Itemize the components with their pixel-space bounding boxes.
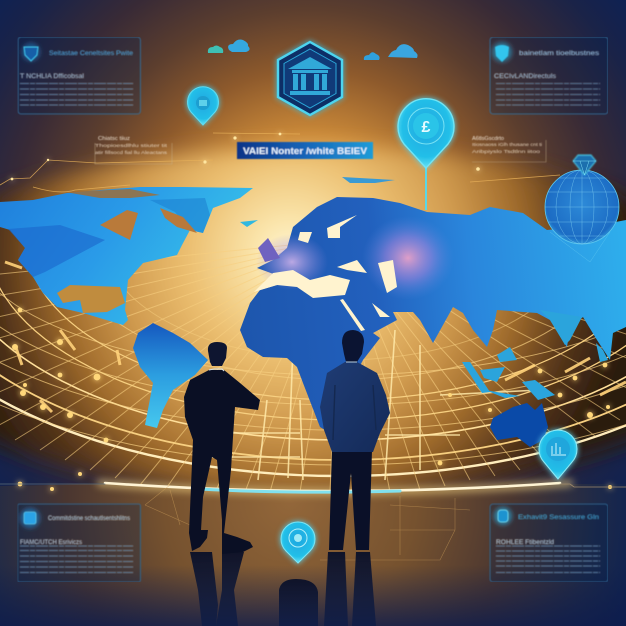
- node lights on upper lines: [11, 133, 480, 180]
- panel body lines: [20, 84, 133, 105]
- icon: small map pin: [188, 87, 218, 125]
- right man trousers: [329, 450, 372, 550]
- text block: right center callout: A6tlsGscdrto: [472, 136, 504, 142]
- seas cut-outs: [254, 215, 397, 331]
- panel subheading: T NCHLIA Dfficobsal: [20, 74, 84, 80]
- text block: left center callout: Thopioesdlhlu stiuter tit: [95, 143, 168, 149]
- hexagon bank badge: [278, 42, 342, 115]
- panel heading: Exhavit9 Sesassure Gln: [518, 514, 600, 521]
- pink glow over Central Asia: [362, 216, 454, 300]
- panel subheading: FIAMC/UTCH Esriviczs: [20, 540, 82, 546]
- icon: stacked badge: [20, 508, 40, 528]
- panel subheading: ROHLEE Ftibentzld: [496, 540, 554, 546]
- text block: left center callout: atir fillsocd fial llu Aleactans: [95, 150, 168, 156]
- left man legs and suit: [184, 370, 260, 554]
- continent: Southeast Asia islands: [462, 310, 608, 400]
- text block: left center callout: [95, 136, 172, 164]
- panel: bottom left info: [18, 504, 140, 582]
- continent: North America: [0, 187, 253, 325]
- right man arm seams: [333, 385, 376, 440]
- pastel glow over Europe: [256, 234, 328, 290]
- glowing nodes on the map: [12, 308, 612, 491]
- continent: Australia: [490, 403, 548, 447]
- right man head: [342, 330, 364, 362]
- panel: bottom right info: [490, 504, 608, 582]
- clouds left: [208, 40, 250, 53]
- text block: right center callout: [472, 136, 546, 162]
- text block: right center callout: Itiosnaoss iGlh thusane cnt ti: [472, 142, 542, 148]
- icon: shield badge: [22, 43, 40, 61]
- title banner: VAIEI Nonter /white BEIEV: [243, 146, 367, 156]
- text block: left center callout: Chiatsc tiiuz: [98, 136, 130, 142]
- icon: large map pin with stem: [398, 99, 454, 210]
- icon: large map pin with stem: £: [422, 119, 431, 136]
- panel body lines: [496, 546, 600, 572]
- map: world continents: [0, 177, 626, 447]
- panel body lines: [496, 84, 600, 105]
- title banner: [237, 142, 373, 159]
- panel: top right info: [490, 37, 608, 114]
- continent: South America: [133, 323, 208, 428]
- continent: Iceland: [240, 220, 258, 227]
- icon: round badge: [494, 507, 512, 525]
- map grid lines: [0, 244, 626, 490]
- glowing map disc: [0, 148, 626, 492]
- icon: diamond pin above globe: [573, 155, 596, 175]
- icon: bottom map pin: [281, 522, 315, 585]
- wireframe globe: [545, 170, 619, 262]
- icon: bank temple: [288, 57, 332, 95]
- left man head: [208, 342, 227, 366]
- text block: right center callout: Aribpiyslo Tsdtlnn iitoo: [472, 149, 540, 155]
- panel heading: bainetlam tioelbustnes: [519, 50, 599, 57]
- figure: left man pointing: [184, 342, 260, 554]
- floor grid lines: [145, 485, 470, 560]
- continent: Africa and Eurasia: [240, 197, 626, 433]
- panel body lines: [20, 546, 133, 572]
- figure: right man in blue suit: [320, 330, 390, 550]
- dark reflection of left man: [190, 552, 244, 626]
- main glowing horizon line: [0, 483, 626, 492]
- panel subheading: CECIvLANDirectuls: [494, 74, 556, 80]
- map: upper connector lines: [0, 133, 560, 192]
- icon: heart shield: [492, 42, 512, 62]
- bottom vignette: [0, 565, 626, 626]
- icon: map pin over Australia: [539, 430, 577, 479]
- panel heading: Commitdstine schautlsentshlitns: [48, 515, 130, 522]
- dark reflection of right man: [279, 552, 376, 626]
- right man collar: [346, 361, 357, 363]
- panel: top left info: [18, 37, 140, 114]
- floor below the horizon: [0, 484, 626, 626]
- panel heading: Seitastae Ceneltsites Pwite: [49, 50, 133, 57]
- clouds right: [364, 44, 418, 60]
- left man collar: [209, 369, 224, 371]
- right man jacket: [320, 362, 390, 452]
- continent: Arctic islands: [342, 177, 395, 183]
